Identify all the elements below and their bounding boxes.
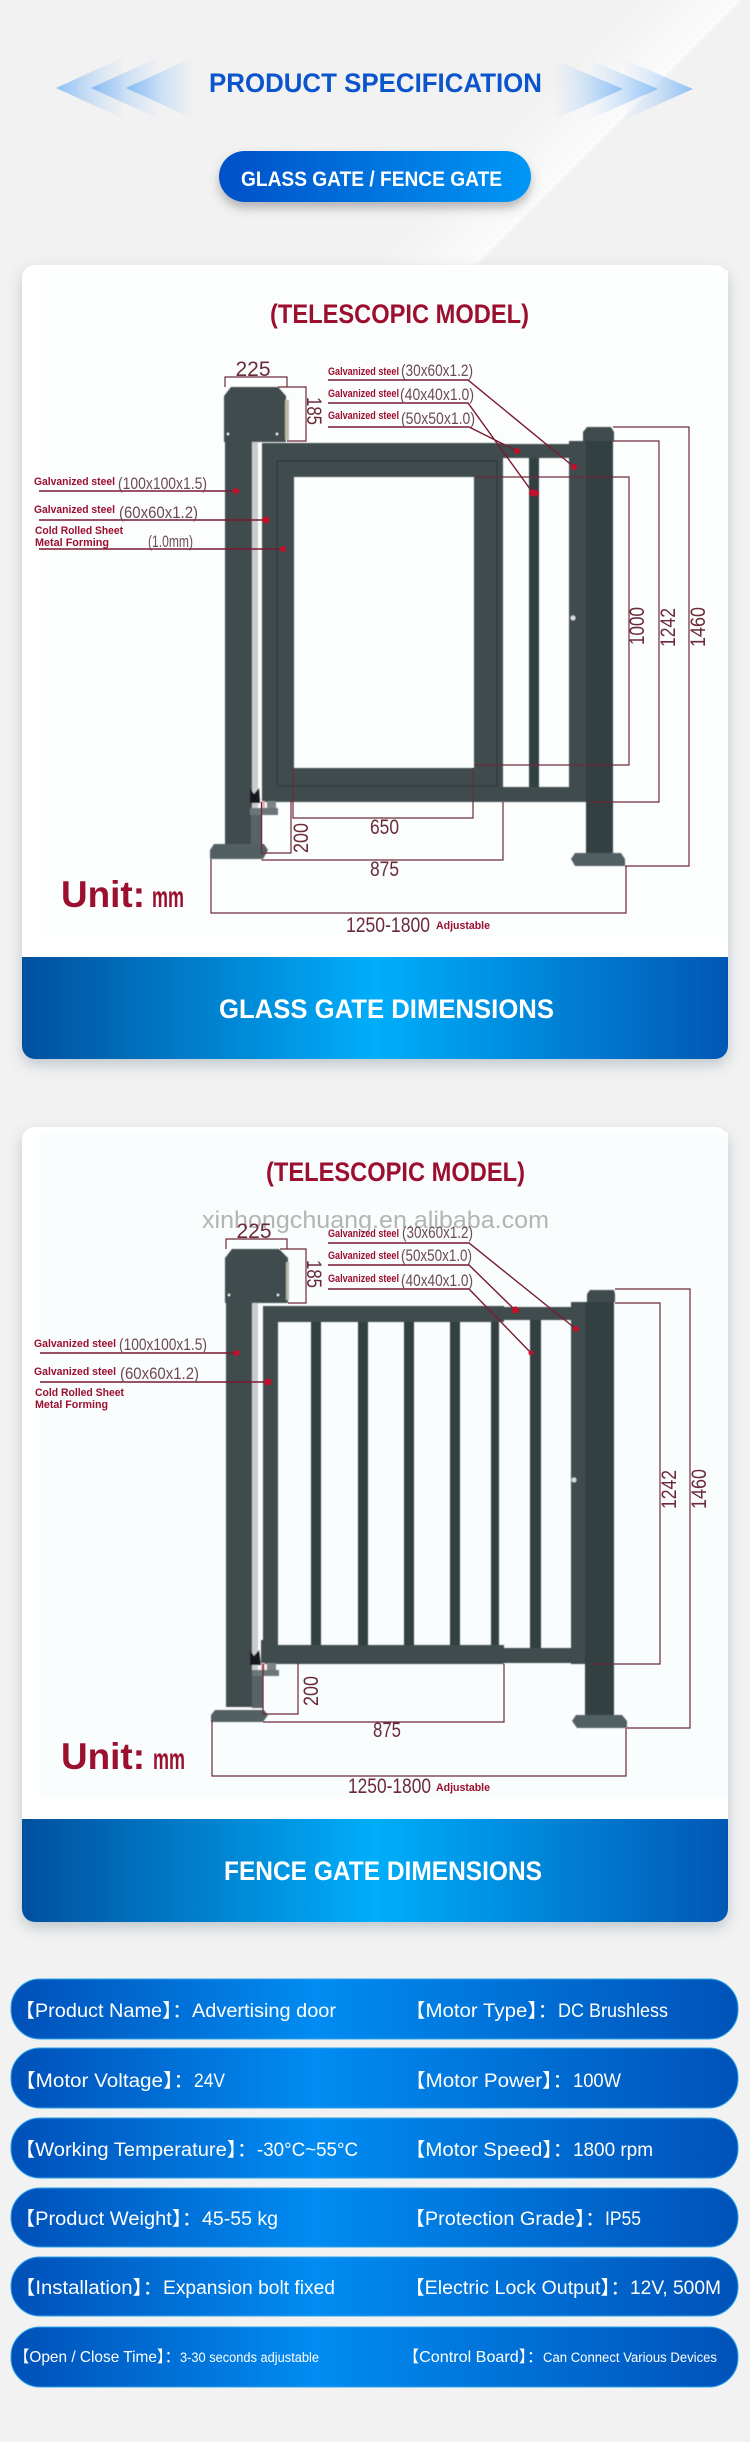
- material callouts: (50x50x1.0): [401, 409, 475, 428]
- left post: [226, 1303, 252, 1707]
- material callouts: (100x100x1.5): [119, 1335, 207, 1354]
- row: installation / electric lock output: [11, 2257, 738, 2316]
- material callouts: [34, 361, 577, 552]
- row: product name / motor type: 【Motor Type】：: [405, 2000, 558, 2022]
- row: installation / electric lock output: 【Installation】：: [15, 2277, 163, 2299]
- panel title: (TELESCOPIC MODEL): [266, 1157, 525, 1187]
- row: product weight / protection grade: 45-55 kg: [202, 2209, 278, 2230]
- left base plate: [210, 844, 268, 859]
- unit label: Unit:: [61, 874, 145, 915]
- row: working temperature / motor speed: 【Motor Speed】：: [405, 2139, 573, 2161]
- unit label: Unit:: [61, 1736, 145, 1777]
- material callouts: Galvanized steel: [328, 1250, 399, 1262]
- title text: PRODUCT SPECIFICATION: [209, 68, 542, 98]
- row: product weight / protection grade: [11, 2188, 738, 2247]
- panel: glass gate dimensions: [22, 265, 728, 1059]
- row: open close time / control board: Can Connect Various Devices: [543, 2350, 717, 2365]
- row: product name / motor type: DC Brushless: [558, 2001, 668, 2022]
- gate frame: [261, 1306, 504, 1664]
- material callouts: (30x60x1.2): [402, 1223, 473, 1242]
- icon: right triple arrows: [555, 60, 693, 119]
- dimension numbers: 650: [370, 816, 399, 839]
- row: product name / motor type: [11, 1979, 738, 2039]
- category pill: GLASS GATE / FENCE GATE: [241, 167, 502, 191]
- icon: left triple arrows: [56, 57, 194, 119]
- dimension numbers: 1250-1800: [346, 914, 430, 937]
- material callouts: Galvanized steel: [34, 1338, 116, 1350]
- material callouts: Cold Rolled Sheet: [35, 525, 123, 537]
- dimension numbers: 875: [370, 858, 399, 881]
- material callouts: Galvanized steel: [328, 1228, 399, 1240]
- row: open close time / control board: [11, 2327, 738, 2387]
- dimension numbers: 185: [302, 397, 325, 425]
- material callouts: (30x60x1.2): [401, 361, 473, 380]
- row: product name / motor type: 【Product Name】：: [15, 2000, 192, 2022]
- dimension numbers: Adjustable: [436, 920, 490, 932]
- telescopic arms: [503, 444, 570, 458]
- material callouts: Galvanized steel: [328, 366, 399, 378]
- row: product name / motor type: Advertising door: [192, 2001, 337, 2022]
- right post: [569, 441, 587, 802]
- row: installation / electric lock output: 12V, 500M: [630, 2278, 721, 2299]
- row: working temperature / motor speed: 1800 rpm: [573, 2140, 653, 2161]
- material callouts: Galvanized steel: [328, 1273, 399, 1285]
- panel: fence gate dimensions: [22, 1127, 728, 1922]
- material callouts: (40x40x1.0): [401, 1271, 473, 1290]
- row: motor voltage / motor power: 24V: [194, 2071, 225, 2092]
- pickets: [311, 1320, 541, 1648]
- left base plate: [211, 1710, 268, 1722]
- spec rows: [11, 1979, 738, 2387]
- middle post: [529, 458, 539, 787]
- dimension numbers: Adjustable: [436, 1782, 490, 1794]
- row: open close time / control board: 3-30 seconds adjustable: [180, 2350, 319, 2365]
- drawing: fence gate: [211, 1249, 627, 1728]
- dimension numbers: 200: [300, 1676, 323, 1706]
- motor box: [225, 1249, 288, 1303]
- row: working temperature / motor speed: 【Working Temperature】：: [15, 2139, 257, 2161]
- row: motor voltage / motor power: 100W: [573, 2071, 621, 2092]
- material callouts: Galvanized steel: [34, 1366, 116, 1378]
- material callouts: Galvanized steel: [328, 410, 399, 422]
- material callouts: Metal Forming: [35, 537, 109, 549]
- telescopic arms: [504, 1307, 571, 1320]
- hinge: [250, 788, 278, 845]
- row: open close time / control board: 【Open / Close Time】：: [14, 2349, 180, 2366]
- dimension numbers: [236, 1220, 711, 1798]
- hinge: [250, 1650, 279, 1708]
- material callouts: Galvanized steel: [34, 476, 115, 488]
- row: installation / electric lock output: 【Electric Lock Output】：: [405, 2277, 630, 2299]
- dimension numbers: 1460: [688, 1469, 711, 1509]
- material callouts: (40x40x1.0): [400, 385, 474, 404]
- panel title: (TELESCOPIC MODEL): [270, 299, 529, 329]
- watermark: xinhongchuang.en.alibaba.com: [202, 1207, 549, 1234]
- motor box: [224, 387, 286, 442]
- banner: glass gate dimensions: [22, 957, 728, 1059]
- dimension numbers: [235, 358, 710, 937]
- row: motor voltage / motor power: [11, 2048, 738, 2108]
- left post: [225, 442, 252, 845]
- row: product weight / protection grade: IP55: [605, 2209, 641, 2230]
- dimension numbers: 1460: [687, 607, 710, 647]
- dimension lines: [211, 377, 689, 913]
- row: product weight / protection grade: 【Product Weight】：: [15, 2208, 202, 2230]
- material callouts: (100x100x1.5): [118, 474, 207, 493]
- material callouts: (60x60x1.2): [120, 1364, 199, 1383]
- banner: fence gate dimensions: [22, 1819, 728, 1922]
- dimension numbers: 1242: [657, 608, 680, 647]
- row: motor voltage / motor power: 【Motor Power】：: [405, 2070, 573, 2092]
- material callouts: (60x60x1.2): [119, 503, 198, 522]
- dimension numbers: 225: [235, 358, 271, 381]
- dimension numbers: 1242: [658, 1470, 681, 1509]
- gate frame with glass: [262, 443, 503, 802]
- dimension numbers: 185: [302, 1260, 325, 1288]
- material callouts: Galvanized steel: [328, 388, 399, 400]
- row: product weight / protection grade: 【Protection Grade】：: [405, 2208, 605, 2230]
- row: open close time / control board: 【Control Board】：: [403, 2349, 543, 2366]
- right base plate: [571, 853, 625, 866]
- row: motor voltage / motor power: 【Motor Voltage】：: [15, 2070, 194, 2092]
- heading: product specification: [56, 57, 693, 119]
- drawing: glass gate: [210, 387, 625, 866]
- material callouts: Metal Forming: [35, 1399, 108, 1411]
- row: working temperature / motor speed: [11, 2118, 738, 2178]
- material callouts: Cold Rolled Sheet: [35, 1387, 124, 1399]
- material callouts: Galvanized steel: [34, 504, 115, 516]
- banner: glass gate dimensions: GLASS GATE DIMENSIONS: [219, 994, 554, 1024]
- dimension numbers: 1250-1800: [348, 1775, 431, 1798]
- material callouts: (1.0mm): [148, 532, 193, 551]
- right post: [571, 1302, 586, 1664]
- material callouts: [34, 1223, 579, 1411]
- dimension lines: [212, 1239, 690, 1776]
- unit label: [61, 1736, 185, 1777]
- dimension numbers: 225: [236, 1220, 272, 1243]
- material callouts: (50x50x1.0): [401, 1246, 472, 1265]
- dimension numbers: 200: [290, 823, 313, 853]
- row: installation / electric lock output: Expansion bolt fixed: [163, 2278, 335, 2299]
- banner: fence gate dimensions: FENCE GATE DIMENSIONS: [224, 1856, 542, 1886]
- dimension numbers: 875: [373, 1719, 401, 1742]
- category pill: [219, 151, 531, 202]
- right base plate: [572, 1715, 627, 1728]
- dimension numbers: 1000: [626, 607, 649, 645]
- unit label: mm: [152, 881, 184, 914]
- unit label: mm: [153, 1743, 185, 1776]
- row: working temperature / motor speed: -30°C~55°C: [257, 2140, 358, 2161]
- unit label: [61, 874, 184, 915]
